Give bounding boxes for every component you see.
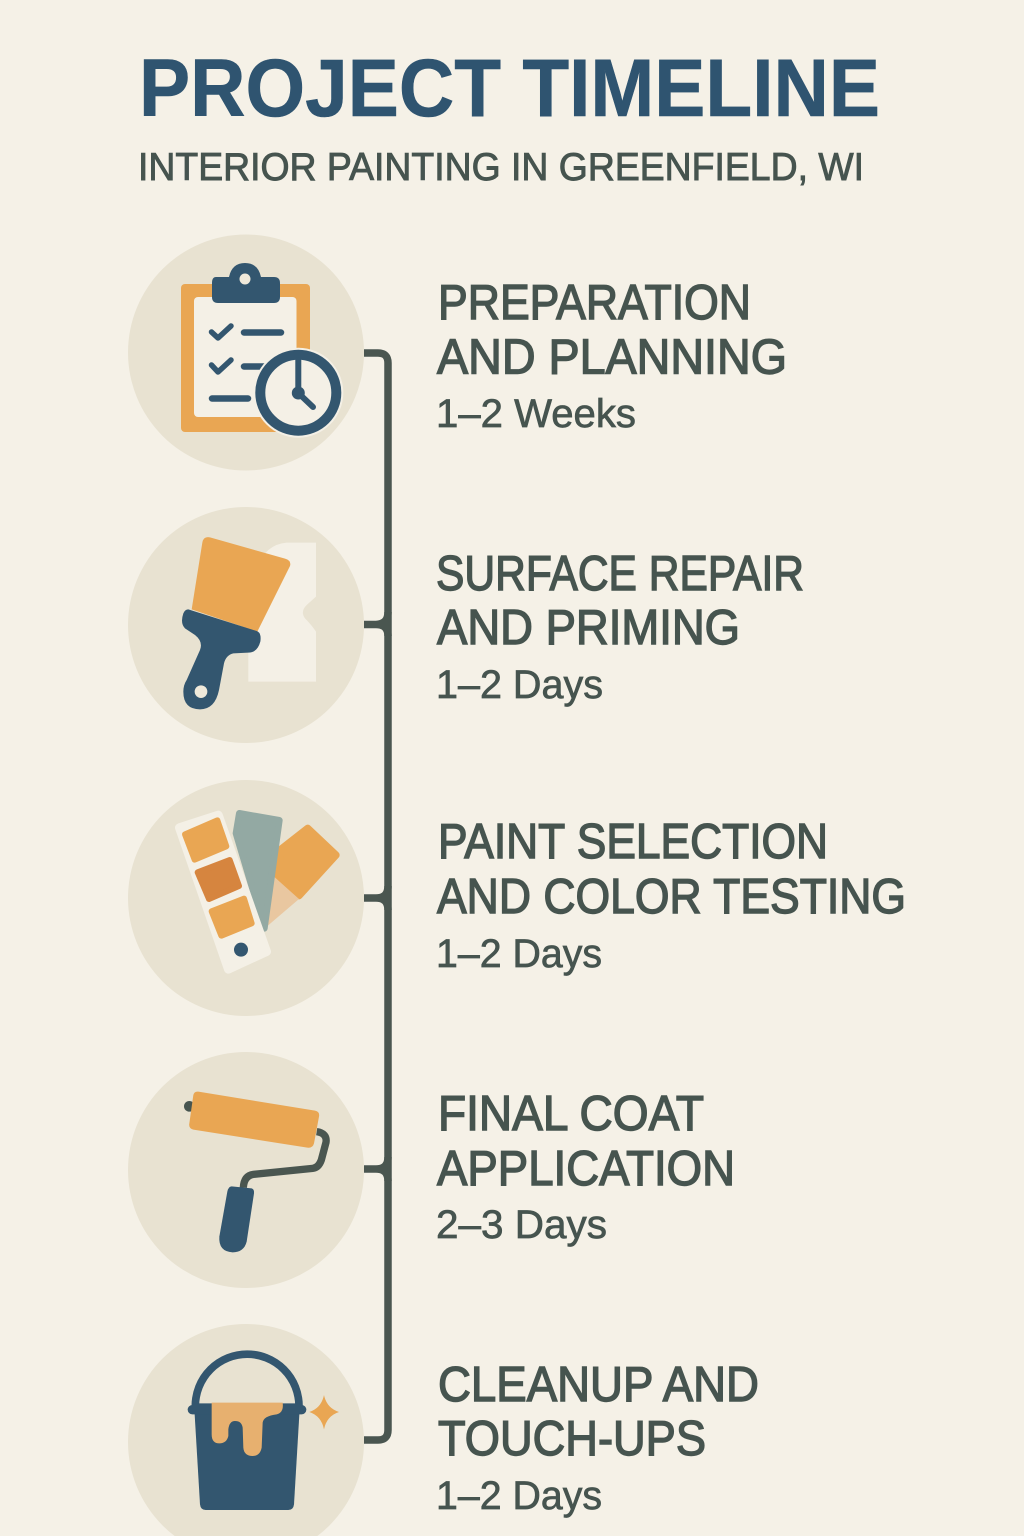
icon: clipboard with clock: [128, 234, 364, 470]
heading line 2: AND COLOR TESTING: [437, 870, 906, 924]
heading: PAINT SELECTION: [438, 815, 828, 869]
step 4: final coat application: [128, 1052, 735, 1288]
duration: 1–2 Days: [436, 932, 602, 976]
heading: FINAL COAT: [438, 1087, 704, 1141]
duration: 2–3 Days: [436, 1203, 607, 1247]
step 5: cleanup and touch-ups: [128, 1324, 759, 1536]
heading line 2: TOUCH-UPS: [438, 1412, 706, 1466]
heading: SURFACE REPAIR: [436, 547, 804, 601]
duration: 1–2 Days: [436, 663, 603, 707]
timeline connector: [364, 353, 388, 1440]
duration: 1–2 Weeks: [436, 392, 636, 436]
heading: CLEANUP AND: [438, 1358, 759, 1412]
step 1: preparation and planning: [128, 234, 787, 470]
step 3: paint selection and color testing: [128, 780, 906, 1016]
heading line 2: AND PLANNING: [437, 330, 787, 384]
icon: paint brush: [128, 507, 364, 743]
step 2: surface repair and priming: [128, 507, 804, 743]
icon: paint roller: [128, 1052, 364, 1288]
duration: 1–2 Days: [436, 1474, 602, 1518]
title: PROJECT TIMELINE: [139, 43, 880, 134]
heading line 2: AND PRIMING: [437, 601, 740, 655]
icon: paint bucket with sparkle: [128, 1324, 364, 1536]
heading line 2: APPLICATION: [437, 1142, 735, 1196]
heading: PREPARATION: [438, 276, 751, 330]
icon: paint swatch fan: [128, 780, 364, 1016]
subtitle: INTERIOR PAINTING IN GREENFIELD, WI: [138, 146, 864, 189]
